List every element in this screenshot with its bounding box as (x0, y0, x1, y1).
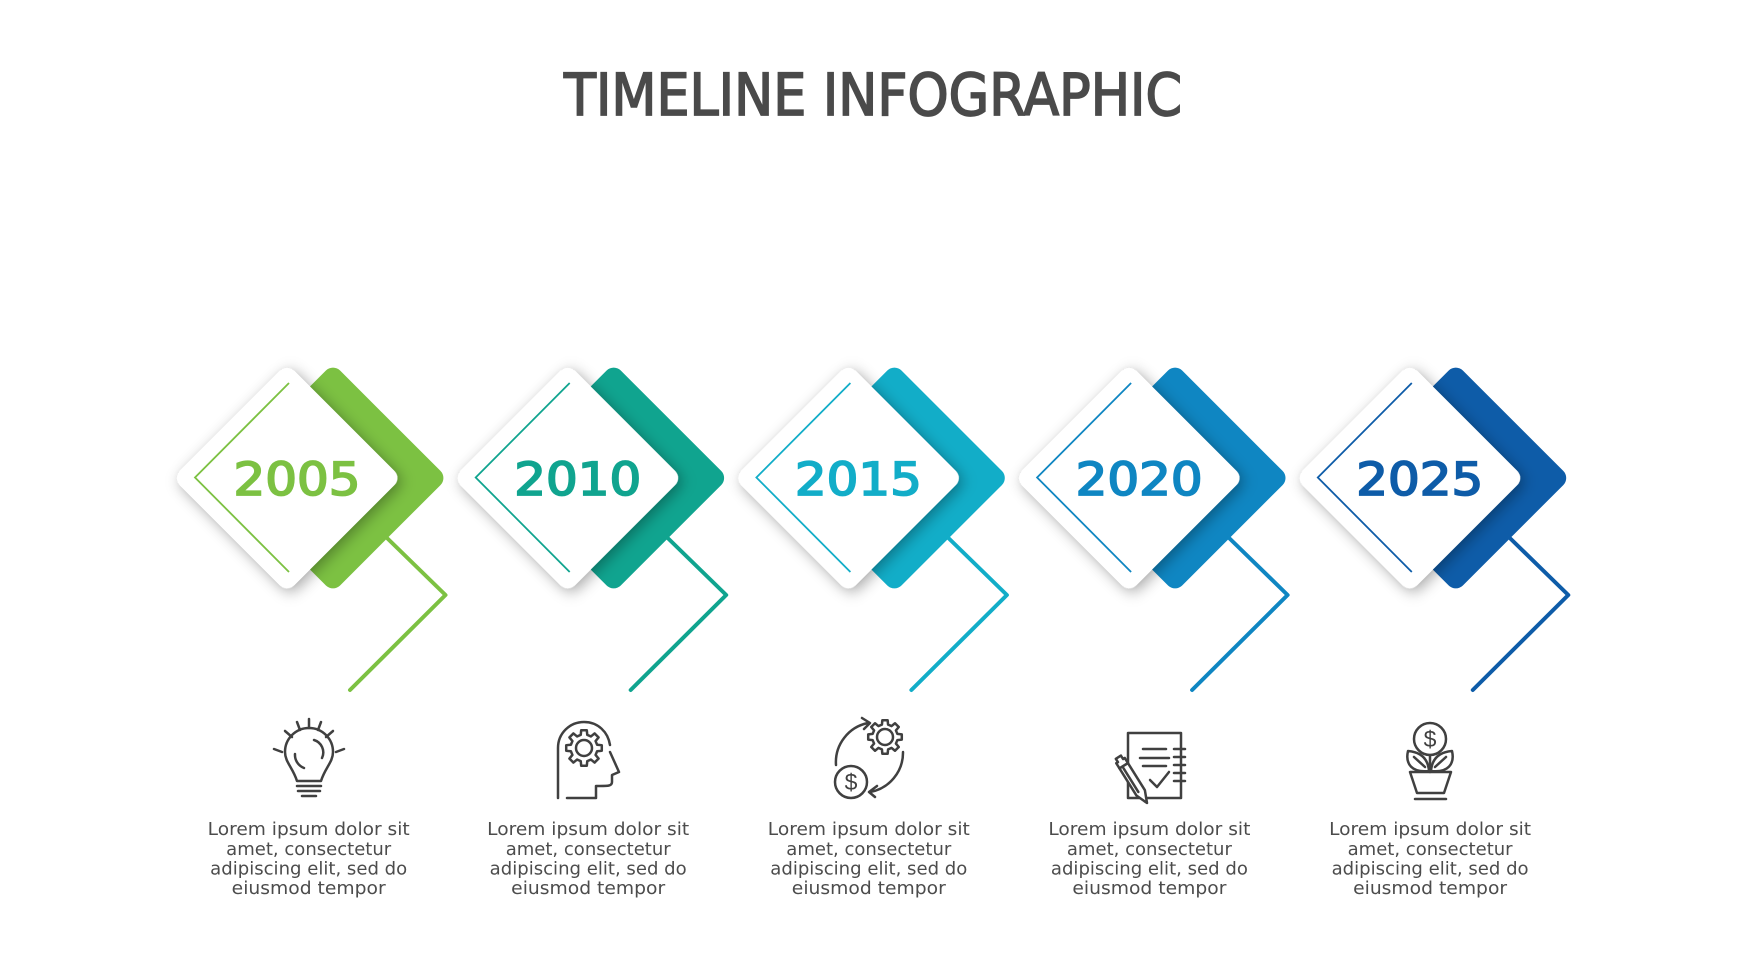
text block 4: amet, consectetur (1067, 839, 1232, 860)
cyan back diamond (780, 363, 1009, 593)
text block 1 (208, 819, 410, 899)
white front diamond (1015, 363, 1244, 593)
connector line (350, 538, 446, 690)
text block 4: eiusmod tempor (1072, 878, 1227, 899)
milestone 2005 (172, 363, 448, 690)
text block 4 (1048, 819, 1250, 899)
text block 5: Lorem ipsum dolor sit (1329, 819, 1531, 840)
white front diamond (1295, 363, 1524, 593)
inner chevron line (1318, 383, 1412, 572)
year: 2020 (1076, 453, 1203, 506)
icon: money and gear cycle: $ (845, 769, 858, 795)
text block 5: eiusmod tempor (1353, 878, 1508, 899)
text block 4: adipiscing elit, sed do (1051, 858, 1248, 880)
text block 1: adipiscing elit, sed do (210, 858, 407, 880)
white front diamond (172, 363, 402, 593)
icon: light bulb (274, 719, 344, 796)
text block 3: amet, consectetur (786, 839, 952, 860)
text block 3 (768, 819, 970, 899)
text block 1: eiusmod tempor (232, 878, 386, 899)
milestone 2015 (734, 363, 1009, 690)
text block 5 (1329, 819, 1531, 899)
year: 2025 (1356, 453, 1483, 506)
text block 4: Lorem ipsum dolor sit (1048, 819, 1250, 840)
icon: document and pen (1114, 733, 1185, 806)
text block 2: Lorem ipsum dolor sit (487, 819, 689, 840)
year: 2015 (795, 453, 922, 506)
connector line (1192, 538, 1288, 690)
text block 2: amet, consectetur (506, 839, 671, 860)
text block 3: Lorem ipsum dolor sit (768, 819, 970, 840)
text block 5: amet, consectetur (1348, 839, 1513, 860)
inner chevron line (476, 383, 570, 572)
green back diamond (218, 363, 448, 593)
inner chevron line (195, 383, 289, 572)
connector line (631, 538, 726, 690)
text block 3: adipiscing elit, sed do (770, 858, 967, 880)
white front diamond (734, 363, 963, 593)
dark blue back diamond (1341, 363, 1570, 593)
icon: money and gear cycle (835, 718, 903, 798)
year: 2005 (234, 453, 360, 506)
icon: money plant: $ (1424, 726, 1437, 752)
title: TIMELINE INFOGRAPHIC (563, 62, 1182, 129)
text block 3: eiusmod tempor (792, 878, 946, 899)
text block 5: adipiscing elit, sed do (1332, 858, 1529, 880)
inner chevron line (756, 383, 850, 572)
text block 1: amet, consectetur (226, 839, 392, 860)
milestone 2020 (1015, 363, 1290, 690)
text block 2 (487, 819, 689, 899)
connector line (1473, 538, 1568, 690)
inner chevron line (1037, 383, 1131, 572)
blue back diamond (1061, 363, 1290, 593)
text block 2: eiusmod tempor (511, 878, 666, 899)
text block 1: Lorem ipsum dolor sit (208, 819, 410, 840)
text block 2: adipiscing elit, sed do (490, 858, 687, 880)
teal back diamond (499, 363, 728, 593)
icon: money plant (1407, 723, 1453, 799)
milestone 2010 (453, 363, 728, 690)
year: 2010 (514, 453, 641, 506)
milestone 2025 (1295, 363, 1570, 690)
connector line (911, 538, 1007, 690)
icon: head with gear (558, 722, 619, 798)
white front diamond (453, 363, 682, 593)
